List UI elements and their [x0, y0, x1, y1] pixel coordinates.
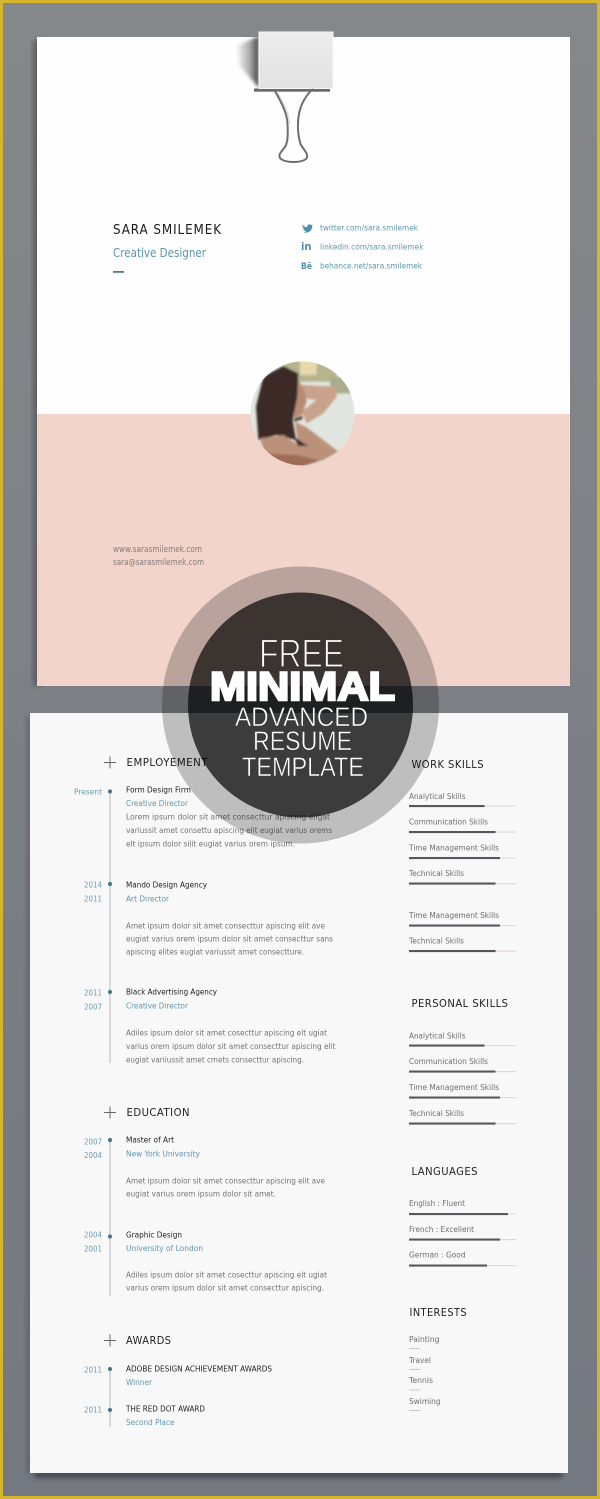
entry: Adobe award: Winner	[126, 1377, 153, 1387]
skill list: Communication Skills	[409, 1056, 488, 1066]
job title: Creative Designer	[113, 246, 206, 260]
section: languages	[409, 1165, 516, 1267]
entry: Mando Design Agency: Amet ipsum dolor sit amet consecttur apiscing elit ave	[126, 920, 325, 930]
heading: personal skills: PERSONAL SKILLS	[412, 997, 508, 1010]
panel: resume inner sheet	[26, 713, 568, 1478]
section: education	[84, 1106, 328, 1296]
language list: English : Fluent	[409, 1198, 466, 1208]
timeline	[108, 1367, 112, 1427]
language list: French : Excellent	[409, 1224, 475, 1234]
entry: Mando Design Agency	[84, 879, 333, 956]
entry: Form Design Firm: Present	[74, 786, 103, 796]
skill list: Technical Skills	[408, 936, 464, 946]
entry: Black Advertising Agency: 2007	[84, 1001, 102, 1011]
skill list: Time Management Skills	[408, 843, 499, 853]
entry: Black Advertising Agency: eugiat variiussit amet cmets consecttur apiscing.	[126, 1054, 304, 1064]
entry: Graphic Design: University of London	[126, 1243, 203, 1253]
heading: employment: EMPLOYEMENT	[126, 756, 208, 769]
interests list: Tennis	[408, 1375, 433, 1385]
entry: Mando Design Agency: Mando Design Agency	[126, 879, 207, 889]
entry: Form Design Firm: variussit amet consettu apiscing elit eugiat varius orems	[126, 825, 332, 835]
entry: Black Advertising Agency	[84, 986, 336, 1064]
entry: Adobe award	[84, 1363, 272, 1387]
entry: Red Dot award	[84, 1403, 205, 1427]
entry: Black Advertising Agency: Adiles ipsum dolor sit amet cosecttur apiscing elt ugiat	[126, 1027, 328, 1037]
heading: languages: LANGUAGES	[412, 1165, 478, 1178]
icon: linkedin: in	[301, 240, 312, 253]
interests list: Painting	[409, 1334, 440, 1344]
entry: Adobe award: ADOBE DESIGN ACHIEVEMENT AWARDS	[126, 1363, 272, 1373]
pink lower band	[37, 414, 570, 686]
social links: twitter.com/sara.smilemek	[320, 222, 418, 232]
icon: plus	[104, 756, 116, 768]
entry: Master of Art: Amet ipsum dolor sit amet consecttur apiscing elit ave	[126, 1175, 325, 1185]
badge: title circle	[162, 566, 439, 844]
accent dash	[113, 271, 124, 273]
timeline	[108, 789, 112, 1063]
entry: Graphic Design: 2004	[84, 1229, 102, 1239]
interests list: Travel	[408, 1355, 431, 1365]
skill list	[408, 791, 516, 952]
entry: Black Advertising Agency: 2011	[84, 987, 102, 997]
entry: Mando Design Agency: 2014	[84, 879, 102, 889]
section: personal skills	[408, 997, 516, 1125]
social links: linkedin.com/sara.smilemek	[320, 241, 424, 251]
heading: education: EDUCATION	[126, 1106, 190, 1119]
section: awards	[84, 1334, 272, 1427]
entry: Red Dot award: 2011	[84, 1404, 102, 1414]
badge title text: ADVANCED	[235, 702, 368, 732]
entry: Graphic Design: varius orem ipsum dolor sit amet consecttur apiscing.	[126, 1282, 324, 1292]
entry: Master of Art: 2007	[84, 1136, 102, 1146]
social links: behance.net/sara.smilemek	[320, 260, 422, 270]
icon: behance: Bē	[301, 262, 312, 272]
section: interests	[408, 1306, 467, 1411]
entry: Form Design Firm: elt ipsum dolor silit eugiat varius orem ipsum.	[126, 838, 295, 848]
inner dark circle	[188, 592, 413, 818]
portrait photo	[250, 358, 355, 467]
icon: binder clip	[236, 32, 333, 162]
entry: Form Design Firm: Form Design Firm	[126, 784, 191, 794]
name heading: SARA SMILEMEK	[113, 223, 222, 238]
badge title text: MINIMAL	[210, 665, 395, 709]
entry: Master of Art: New York University	[126, 1148, 200, 1158]
entry: Form Design Firm	[74, 784, 332, 848]
entry: Graphic Design: Adiles ipsum dolor sit amet cosecttur apiscing elt ugiat	[126, 1269, 328, 1279]
panel: resume cover sheet	[33, 32, 570, 686]
section: employment	[74, 756, 336, 1064]
badge title text: FREE	[259, 632, 344, 676]
entry: Master of Art	[84, 1134, 325, 1198]
entry: Black Advertising Agency: varius orem ipsum dolor sit amet consecttur apiscing elit	[126, 1041, 336, 1051]
timeline	[108, 1138, 112, 1296]
badge title text: TEMPLATE	[242, 752, 364, 782]
social links	[301, 222, 424, 272]
icon: plus	[104, 1334, 116, 1346]
entry: Graphic Design: Graphic Design	[126, 1229, 182, 1239]
section: work skills	[408, 758, 516, 952]
entry: Mando Design Agency: eugiat varius orem ipsum dolor sit amet consecttur sans	[126, 933, 333, 943]
entry: Red Dot award: Second Place	[126, 1417, 174, 1427]
contact details: sara@sarasmilemek.com	[113, 558, 204, 568]
icon: plus	[104, 1106, 116, 1118]
entry: Master of Art: 2004	[84, 1150, 102, 1160]
entry: Graphic Design	[84, 1229, 328, 1292]
entry: Form Design Firm: Lorem ipsum dolor sit amet consecttur apiscing eligat	[126, 811, 331, 821]
entry: Graphic Design: 2001	[84, 1243, 102, 1253]
heading: awards: AWARDS	[126, 1334, 172, 1347]
entry: Mando Design Agency: Art Director	[126, 893, 170, 903]
outer translucent ring	[162, 566, 439, 844]
entry: Master of Art: eugiat varius orem ipsum dolor sit amet.	[126, 1188, 276, 1198]
interests list	[408, 1334, 440, 1411]
skill list: Communication Skills	[409, 817, 488, 827]
skill list	[408, 1031, 516, 1125]
badge title text	[210, 632, 395, 782]
contact details: www.sarasmilemek.com	[113, 545, 202, 555]
entry: Mando Design Agency: 2011	[84, 893, 102, 903]
entry: Black Advertising Agency: Black Advertising Agency	[126, 986, 217, 996]
language list: German : Good	[409, 1250, 466, 1260]
entry: Red Dot award: THE RED DOT AWARD	[125, 1403, 205, 1413]
skill list: Analytical Skills	[409, 791, 466, 801]
skill list: Time Management Skills	[408, 1082, 499, 1092]
language list	[409, 1198, 516, 1267]
skill list: Time Management Skills	[408, 910, 499, 920]
heading: work skills: WORK SKILLS	[412, 758, 484, 771]
entry: Black Advertising Agency: Creative Director	[126, 1000, 189, 1010]
entry: Form Design Firm: Creative Director	[126, 798, 189, 808]
entry: Master of Art: Master of Art	[126, 1134, 175, 1144]
badge title text: RESUME	[253, 726, 352, 756]
skill list: Technical Skills	[408, 868, 464, 878]
entry: Adobe award: 2011	[84, 1364, 102, 1374]
contact details	[113, 545, 204, 568]
heading: interests: INTERESTS	[410, 1306, 467, 1319]
skill list: Technical Skills	[408, 1108, 464, 1118]
interests list: Swiming	[409, 1396, 440, 1406]
entry: Mando Design Agency: apiscing elites eugiat variussit amet consectture.	[126, 946, 304, 956]
skill list: Analytical Skills	[409, 1031, 466, 1041]
icon: twitter	[302, 224, 313, 233]
